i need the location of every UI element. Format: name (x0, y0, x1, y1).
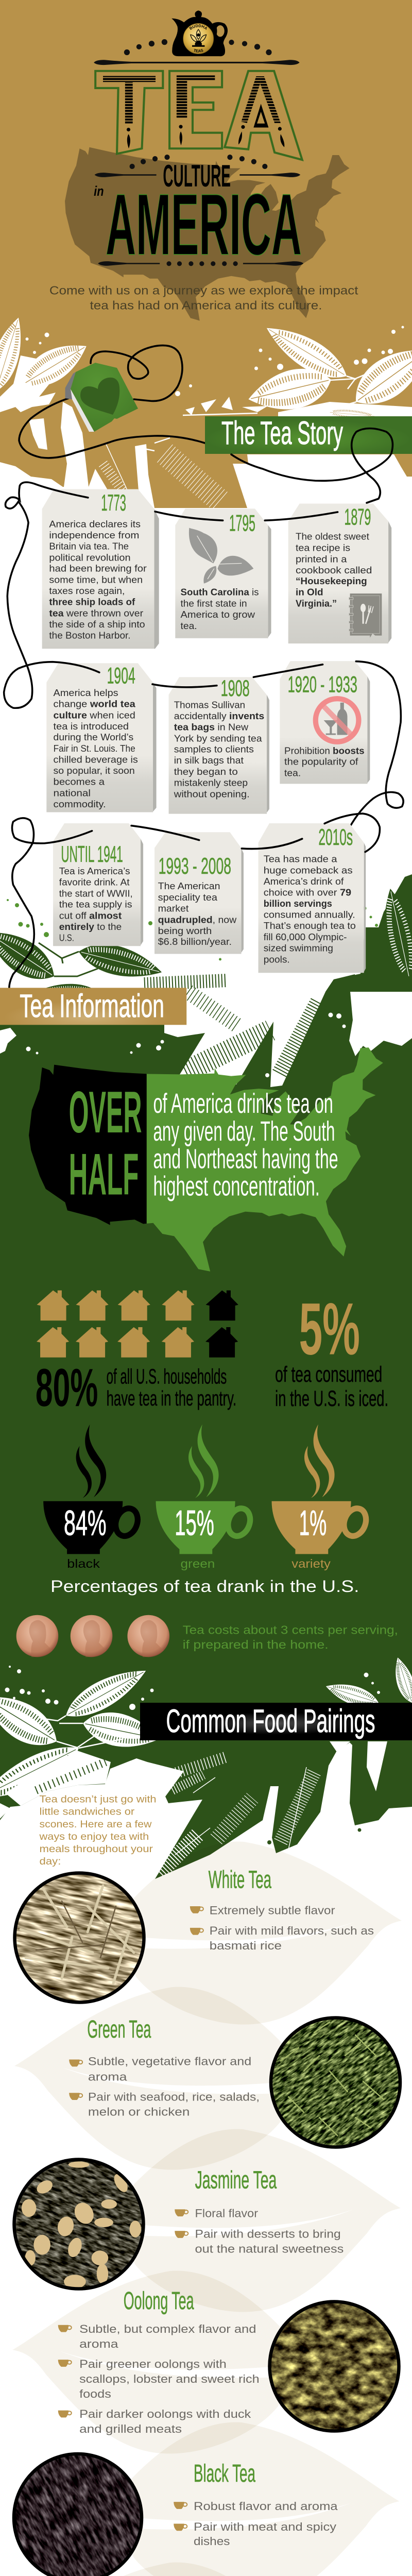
card 1908: without opening. (174, 788, 250, 799)
map statement text (153, 1089, 338, 1201)
card 1773: some time, but when (49, 574, 143, 585)
card 1879: “Housekeeping (296, 575, 367, 586)
oolong tea text: Oolong Tea (124, 2287, 194, 2315)
card until 1941: cut off almost (59, 910, 122, 921)
green tea text: melon or chicken (88, 2106, 190, 2119)
cup: black tea 84 percent: black (67, 1557, 100, 1570)
photo: green tea (269, 2016, 402, 2149)
panel: white tea: basmati rice (210, 1939, 282, 1952)
card 1904: chilled beverage is (54, 754, 138, 765)
title block: CULTURE (163, 158, 231, 193)
green leaf art behind the tea story cards (0, 874, 412, 1025)
card 1904: tea is introduced (54, 721, 129, 732)
card 1773 (42, 489, 159, 649)
card 1773: the Boston Harbor. (49, 630, 131, 640)
intro text for food pairings: ways to enjoy tea with (39, 1831, 149, 1842)
intro text: Come with us on a journey as we explore the impact (49, 283, 358, 297)
card 2010s: consumed annually. (264, 909, 355, 920)
card 1920 to 1933: tea. (284, 768, 301, 778)
intro text for food pairings: day: (40, 1856, 61, 1867)
card 2010s: America’s drink of (264, 876, 344, 887)
icon: tea bag tag with heart (65, 345, 182, 432)
tan leaf hatching below the header (103, 443, 221, 507)
icon: recipe book (349, 594, 382, 638)
card 1904: commodity. (54, 799, 106, 809)
card 1920 to 1933: the popularity of (284, 756, 358, 767)
card 1908: in silk bags that (174, 755, 244, 766)
card 1920 to 1933: Prohibition boosts (284, 745, 365, 756)
oolong tea text: Pair greener oolongs with (79, 2358, 227, 2370)
icon row: houses 80 percent (37, 1291, 238, 1358)
icon: teapot with Buddha Teas coin (171, 10, 228, 57)
stat: 80 percent of households: of all U.S. households (107, 1365, 227, 1388)
card 1773: the side of a ship into (49, 619, 145, 630)
oolong tea text: Pair darker oolongs with duck (79, 2408, 251, 2420)
tan header background with leaf silhouettes (0, 0, 412, 510)
stat: 80 percent of households (36, 1358, 236, 1417)
stat: 5 percent iced: 5% (299, 1289, 360, 1370)
card until 1941: entirely to the (59, 921, 122, 932)
panel: white tea: White Tea (209, 1866, 271, 1893)
icon: prohibition sign (316, 699, 358, 742)
decorative dot arcs and swashes (94, 39, 303, 266)
photo: jasmine tea (12, 2158, 145, 2291)
icon: three pennies (16, 1615, 169, 1657)
card 1879: 1879 (344, 504, 371, 530)
banner: Tea Information (0, 988, 186, 1025)
card until 1941: Tea is America’s (59, 866, 130, 876)
jasmine tea text: Pair with desserts to bring (195, 2227, 341, 2240)
title word: in: in (94, 183, 104, 199)
card 1773: tea were thrown over (49, 607, 143, 618)
strings connecting the lower tags (9, 814, 380, 988)
icon: teapot with Buddha Teas coin: BUDDHA (189, 24, 207, 30)
stat: 80 percent of households: have tea in the pantry. (107, 1386, 236, 1410)
card 1879: cookbook called (296, 565, 372, 575)
white leaf art on dark green above food pairings (0, 1655, 412, 1873)
card 2010s: sized swimming (264, 942, 333, 953)
card 1908: York by sending tea (174, 733, 263, 743)
panel: tea story timeline continued (0, 814, 380, 1025)
card 1773: political revolution (49, 552, 131, 563)
card 2010s: 2010s (318, 825, 353, 850)
oolong tea text (58, 2287, 260, 2435)
card until 1941: UNTIL 1941 (61, 842, 123, 867)
card 1993 to 2008: The American (158, 880, 220, 891)
cup: variety tea 1 percent: 1% (299, 1504, 327, 1543)
card 1773: taxes rose again, (49, 585, 125, 596)
card 1993 to 2008: 1993 - 2008 (159, 854, 231, 879)
card 2010s: pools. (264, 954, 290, 964)
card 1908: Thomas Sullivan (174, 699, 245, 710)
card 1993 to 2008: market (158, 903, 188, 913)
intro text for food pairings: Tea doesn’t just go with (40, 1793, 157, 1805)
card 1795 (175, 509, 271, 638)
card 1904 (46, 663, 157, 812)
US map silhouette behind title (65, 147, 350, 320)
card 1904: change world tea (54, 698, 136, 709)
card 1908: samples to clients (174, 744, 254, 755)
banner: Tea Information: Tea Information (20, 988, 164, 1024)
card 1773: independence from (49, 530, 139, 540)
card 2010s (259, 823, 366, 973)
card 1773: America declares its (49, 518, 141, 529)
panel: white tea (87, 1866, 374, 2043)
black tea text: dishes (194, 2535, 230, 2548)
green tea text: Subtle, vegetative flavor and (88, 2055, 251, 2068)
card 1773: had been brewing for (49, 563, 147, 574)
intro text for food pairings (39, 1793, 157, 1867)
card until 1941: the start of WWII, (59, 888, 133, 899)
card 1795: America to grow (181, 609, 255, 620)
card 1773: Britain via tea. The (49, 540, 129, 551)
card 1904: so popular, it soon (54, 765, 135, 776)
heading: green tea: Green Tea (87, 2016, 151, 2043)
card 1904: Fair in St. Louis. The (54, 743, 135, 754)
jasmine tea text: out the natural sweetness (195, 2242, 344, 2255)
card 1879: Virginia.” (296, 598, 337, 609)
card 1920 to 1933: 1920 - 1933 (288, 672, 357, 697)
oolong tea text: aroma (79, 2337, 118, 2350)
cup: black tea 84 percent (43, 1425, 142, 1570)
dark green information background (0, 974, 412, 1879)
card 1904: national (54, 787, 91, 798)
green tea text (69, 2055, 260, 2119)
card 1773: 1773 (101, 490, 126, 516)
panel: remaining tea descriptions (58, 2055, 344, 2576)
US map: over half of America: HALF (69, 1142, 139, 1207)
oolong tea text: foods (79, 2387, 111, 2400)
panel: tea story timeline (4, 482, 403, 827)
card 1795: tea. (181, 620, 197, 631)
card 1795: South Carolina is (181, 587, 259, 598)
stat: 80 percent of households: 80% (36, 1358, 98, 1417)
card 1879: printed in a (296, 553, 347, 564)
card 1795: the first state in (181, 598, 247, 609)
panel: white tea: Extremely subtle flavor (210, 1904, 335, 1917)
oolong tea text: scallops, lobster and sweet rich (79, 2372, 260, 2385)
card 1904: America helps (54, 687, 118, 698)
panel: white tea: Pair with mild flavors, such as (210, 1924, 374, 1937)
card 1920 to 1933 (280, 661, 370, 784)
cup: black tea 84 percent: 84% (64, 1504, 107, 1543)
card 1908: accidentally invents (174, 710, 264, 721)
US map: over half of America: OVER (69, 1080, 142, 1145)
big text: OVER HALF (69, 1080, 142, 1207)
beige leaf shapes behind tea descriptions (12, 1841, 402, 2576)
green tea text: Pair with seafood, rice, salads, (88, 2091, 260, 2104)
card 1795: 1795 (229, 511, 255, 536)
card 1908 (169, 676, 269, 814)
cup: green tea 15 percent: green (181, 1557, 215, 1570)
black tea text: Robust flavor and aroma (194, 2500, 338, 2513)
card 2010s: billion servings (264, 898, 332, 909)
card 2010s: huge comeback as (264, 865, 353, 875)
black tea text (174, 2460, 338, 2548)
card 1908: mistakenly steep (174, 777, 248, 788)
intro text for food pairings: scones. Here are a few (40, 1819, 152, 1830)
intro text for food pairings: little sandwiches or (40, 1806, 135, 1817)
card until 1941: U.S. (59, 933, 74, 943)
card 2010s: Tea has made a (264, 853, 337, 864)
card until 1941 (53, 823, 143, 946)
text: cost per serving: Tea costs about 3 cents per serving, (183, 1623, 398, 1636)
black tea text: Pair with meat and spicy (194, 2520, 337, 2533)
photo: white tea (13, 1871, 146, 2004)
card 1773: three ship loads of (49, 596, 135, 607)
oolong tea text: and grilled meats (79, 2422, 182, 2435)
text: cost per serving: if prepared in the home. (183, 1638, 329, 1651)
string over banner and down to first card (231, 429, 392, 503)
green tea text: aroma (88, 2070, 127, 2083)
card until 1941: the tea supply is (59, 899, 132, 910)
cup: variety tea 1 percent: variety (291, 1557, 331, 1570)
jasmine tea text: Floral flavor (195, 2207, 259, 2220)
card 1879: in Old (296, 587, 323, 598)
card 1904: culture when iced (54, 709, 135, 720)
card 1993 to 2008: $6.8 billion/year. (158, 936, 232, 947)
title word: TEA (95, 71, 302, 160)
cup: green tea 15 percent (156, 1425, 254, 1570)
card 1993 to 2008 (154, 832, 244, 954)
card 1908: they began to (174, 766, 238, 777)
black tea text: Black Tea (194, 2460, 255, 2487)
intro text for food pairings: meals throughout your (40, 1843, 153, 1855)
card 1993 to 2008: quadrupled, now (158, 914, 237, 925)
intro text (49, 283, 358, 312)
card 1993 to 2008: being worth (158, 925, 212, 936)
card until 1941: favorite drink. At (59, 876, 130, 887)
oolong tea text: Subtle, but complex flavor and (79, 2323, 256, 2335)
card 1879: The oldest sweet (296, 531, 369, 541)
card 2010s: choice with over 79 (264, 887, 351, 897)
intro text: tea has had on America and its culture. (90, 299, 322, 312)
photo: black tea (12, 2452, 143, 2576)
icon: tea leaves (189, 528, 253, 584)
strings connecting the tea tags (4, 482, 403, 827)
cup: variety tea 1 percent (272, 1425, 370, 1570)
jasmine tea text: Jasmine Tea (195, 2166, 277, 2194)
card 1908: tea bags in New (174, 721, 249, 732)
caption: percentages: Percentages of tea drank in the U.S. (50, 1577, 359, 1596)
card 1908: 1908 (221, 676, 250, 701)
tea bag string left of banner (19, 398, 205, 458)
card 1879: tea recipe is (296, 542, 350, 553)
icon: teapot with Buddha Teas coin: TEAS (194, 48, 203, 53)
card 1879 (288, 504, 391, 643)
statistics block (16, 1289, 398, 1657)
stat: 5 percent iced (275, 1289, 388, 1411)
card 2010s: fill 60,000 Olympic- (264, 931, 347, 942)
cup: green tea 15 percent: 15% (175, 1504, 214, 1543)
card 1904: during the World’s (54, 732, 133, 742)
card 2010s: That’s enough tea to (264, 920, 356, 931)
text: cost per serving (183, 1623, 398, 1651)
card 1904: 1904 (107, 664, 135, 689)
card 1993 to 2008: speciality tea (158, 892, 218, 903)
jasmine tea text (175, 2166, 344, 2255)
card 1904: becomes a (54, 776, 105, 787)
US map: over half of America (29, 1047, 383, 1272)
photo: oolong tea (269, 2301, 399, 2431)
title block (49, 10, 358, 312)
